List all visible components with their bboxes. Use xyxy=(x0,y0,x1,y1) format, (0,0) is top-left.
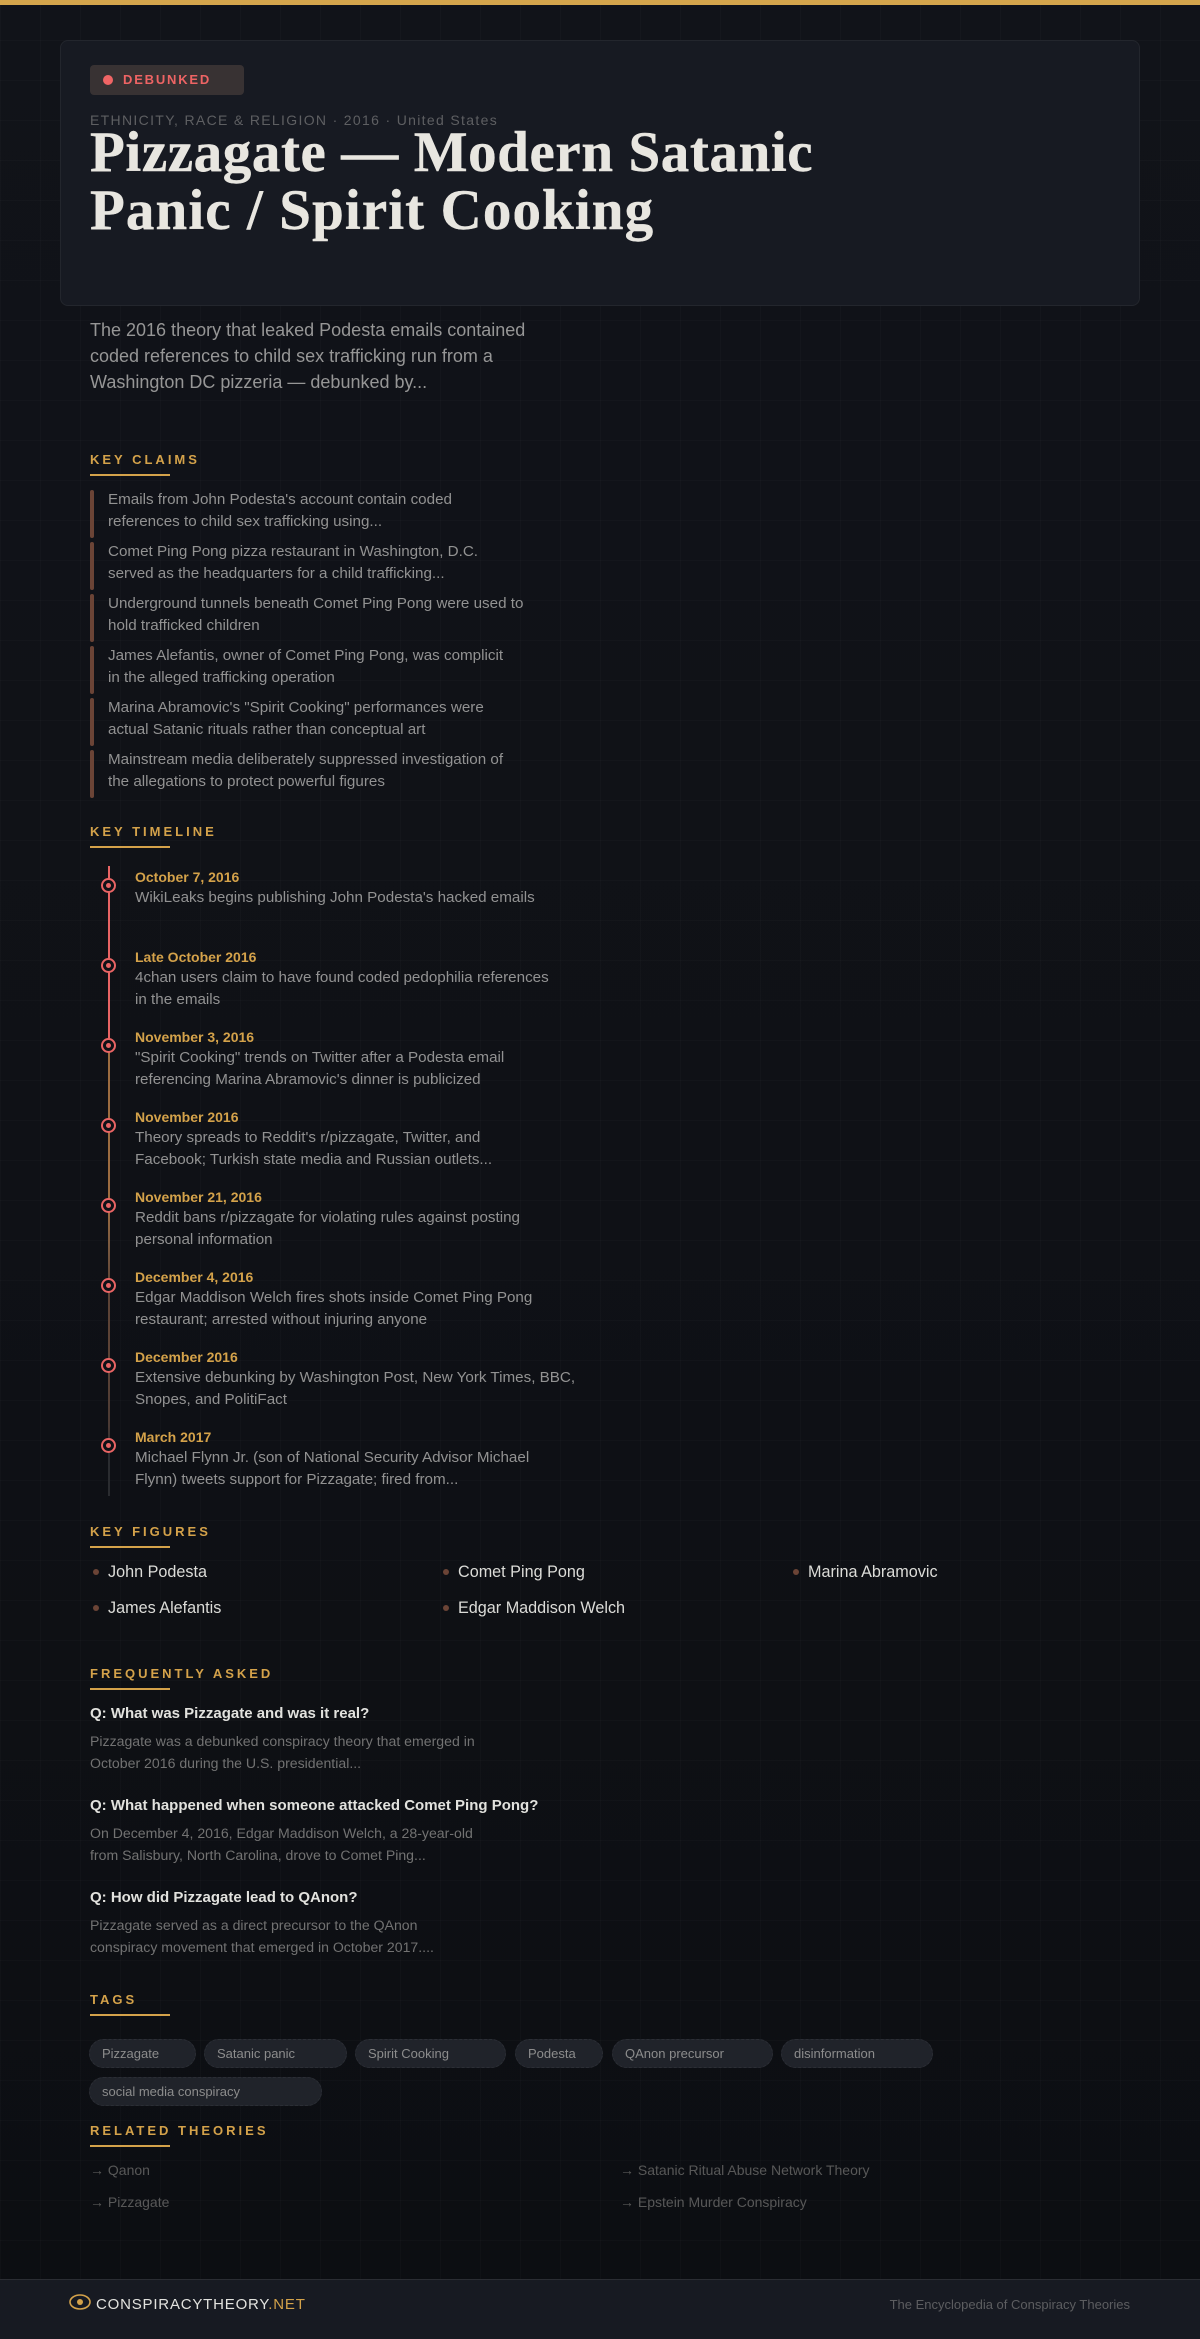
claim 4: in the alleged trafficking operation xyxy=(108,669,335,686)
status badge: debunked xyxy=(90,65,244,95)
faq 2: On December 4, 2016, Edgar Maddison Welch, a 28-year-old xyxy=(90,1825,473,1841)
tag: social media conspiracy xyxy=(89,2077,322,2106)
title: Panic / Spirit Cooking xyxy=(90,179,654,242)
panel: related theories list xyxy=(90,2162,870,2210)
tag: Satanic panic: Satanic panic xyxy=(217,2046,295,2061)
event: November 2016: Theory spreads to Reddit's r/pizzagate, Twitter, and xyxy=(135,1129,480,1146)
logo wordmark: CONSPIRACYTHEORY.NET xyxy=(96,2296,306,2313)
tag: disinformation: disinformation xyxy=(794,2046,875,2061)
tag: QAnon precursor xyxy=(612,2039,773,2068)
icon: status dot xyxy=(103,75,113,85)
panel: claims list xyxy=(90,490,523,798)
tag: Satanic panic xyxy=(204,2039,347,2068)
faq 1: Q: What was Pizzagate and was it real? xyxy=(90,1705,369,1722)
event: December 2016: Extensive debunking by Washington Post, New York Times, BBC, xyxy=(135,1369,575,1386)
event: March 2017: Flynn) tweets support for Pizzagate; fired from... xyxy=(135,1471,458,1488)
faq 2: Q: What happened when someone attacked Comet Ping Pong? xyxy=(90,1797,538,1814)
chart: timeline: March 2017 xyxy=(135,1429,211,1445)
claim 4 xyxy=(90,646,503,694)
panel: tag pills xyxy=(89,2039,933,2106)
tag: QAnon precursor: QAnon precursor xyxy=(625,2046,724,2061)
event: Late October 2016 xyxy=(101,949,549,1008)
event: December 4, 2016: Edgar Maddison Welch fires shots inside Comet Ping Pong xyxy=(135,1289,532,1306)
panel: key figures list xyxy=(93,1563,938,1617)
event: March 2017: Michael Flynn Jr. (son of National Security Advisor Michael xyxy=(135,1449,529,1466)
claim 5: actual Satanic rituals rather than conceptual art xyxy=(108,721,425,738)
tag: Podesta xyxy=(515,2039,603,2068)
tag: Pizzagate: Pizzagate xyxy=(102,2046,159,2061)
claim 1 xyxy=(90,490,452,538)
heading: key claims: KEY CLAIMS xyxy=(90,452,200,467)
tag: Pizzagate xyxy=(89,2039,196,2068)
claim 5 xyxy=(90,698,484,746)
figure: John Podesta: John Podesta xyxy=(108,1563,207,1581)
event: March 2017 xyxy=(101,1429,529,1488)
event: November 3, 2016: referencing Marina Abramovic's dinner is publicized xyxy=(135,1071,481,1088)
category meta line: ETHNICITY, RACE & RELIGION · 2016 · United States xyxy=(90,112,498,128)
event: November 2016: Facebook; Turkish state media and Russian outlets... xyxy=(135,1151,492,1168)
faq 2: from Salisbury, North Carolina, drove to Comet Ping... xyxy=(90,1847,426,1863)
event: October 7, 2016: WikiLeaks begins publishing John Podesta's hacked emails xyxy=(135,889,535,906)
summary text xyxy=(90,320,525,392)
heading: frequently asked: FREQUENTLY ASKED xyxy=(90,1666,273,1681)
chart: timeline: November 3, 2016 xyxy=(135,1029,254,1045)
chart: timeline: November 2016 xyxy=(135,1109,239,1125)
timeline spine xyxy=(108,866,110,1496)
chart: timeline: Late October 2016 xyxy=(135,949,256,965)
claim 2: Comet Ping Pong pizza restaurant in Washington, D.C. xyxy=(108,543,478,560)
tag: social media conspiracy: social media conspiracy xyxy=(102,2084,240,2099)
tag: Podesta: Podesta xyxy=(528,2046,576,2061)
claim 3: Underground tunnels beneath Comet Ping Pong were used to xyxy=(108,595,523,612)
claim 2: served as the headquarters for a child trafficking... xyxy=(108,565,445,582)
event: December 2016 xyxy=(101,1349,575,1408)
faq 2 xyxy=(90,1797,538,1863)
claim 3: hold trafficked children xyxy=(108,617,260,634)
faq 3: conspiracy movement that emerged in October 2017.... xyxy=(90,1939,434,1955)
faq 3: Pizzagate served as a direct precursor to the QAnon xyxy=(90,1917,417,1933)
claim 1: references to child sex trafficking using... xyxy=(108,513,382,530)
claim 1: Emails from John Podesta's account contain coded xyxy=(108,491,452,508)
heading: related theories: RELATED THEORIES xyxy=(90,2123,268,2138)
summary text: Washington DC pizzeria — debunked by... xyxy=(90,372,427,392)
event: Late October 2016: in the emails xyxy=(135,991,220,1008)
event: December 4, 2016: restaurant; arrested without injuring anyone xyxy=(135,1311,427,1328)
icon: eye logo xyxy=(69,2294,91,2310)
faq 1: October 2016 during the U.S. presidential... xyxy=(90,1755,361,1771)
event: November 2016 xyxy=(101,1109,492,1168)
summary text: coded references to child sex trafficking run from a xyxy=(90,346,493,366)
faq 3: Q: How did Pizzagate lead to QAnon? xyxy=(90,1889,358,1906)
event: November 21, 2016: Reddit bans r/pizzagate for violating rules against posting xyxy=(135,1209,520,1226)
figure: James Alefantis: James Alefantis xyxy=(108,1599,221,1617)
footer xyxy=(0,2279,1200,2339)
chart: timeline: October 7, 2016 xyxy=(135,869,239,885)
faq 1: Pizzagate was a debunked conspiracy theory that emerged in xyxy=(90,1733,475,1749)
chart: timeline: December 4, 2016 xyxy=(135,1269,253,1285)
claim 6: Mainstream media deliberately suppressed investigation of xyxy=(108,751,503,768)
link: Satanic Ritual Abuse Network Theory: → Satanic Ritual Abuse Network Theory xyxy=(620,2162,870,2178)
faq 3 xyxy=(90,1889,434,1955)
event: November 3, 2016: "Spirit Cooking" trends on Twitter after a Podesta email xyxy=(135,1049,504,1066)
link: Qanon: → Qanon xyxy=(90,2162,150,2178)
figure: Comet Ping Pong: Comet Ping Pong xyxy=(458,1563,585,1581)
tag: disinformation xyxy=(781,2039,933,2068)
footer tagline: The Encyclopedia of Conspiracy Theories xyxy=(890,2297,1130,2312)
event: October 7, 2016 xyxy=(101,869,535,906)
link: Epstein Murder Conspiracy: → Epstein Murder Conspiracy xyxy=(620,2194,807,2210)
tag: Spirit Cooking: Spirit Cooking xyxy=(368,2046,449,2061)
claim 6 xyxy=(90,750,504,798)
heading: key figures: KEY FIGURES xyxy=(90,1524,211,1539)
panel: hero header xyxy=(60,40,1140,306)
claim 5: Marina Abramovic's "Spirit Cooking" performances were xyxy=(108,699,484,716)
event: November 3, 2016 xyxy=(101,1029,504,1088)
claim 6: the allegations to protect powerful figures xyxy=(108,773,385,790)
link: Pizzagate: → Pizzagate xyxy=(90,2194,169,2210)
summary text: The 2016 theory that leaked Podesta emails contained xyxy=(90,320,525,340)
chart: timeline xyxy=(101,866,575,1496)
event: November 21, 2016 xyxy=(101,1189,520,1248)
top accent bar xyxy=(0,0,1200,5)
chart: timeline: December 2016 xyxy=(135,1349,238,1365)
title xyxy=(90,121,813,242)
tag: Spirit Cooking xyxy=(355,2039,506,2068)
event: December 4, 2016 xyxy=(101,1269,532,1328)
event: Late October 2016: 4chan users claim to have found coded pedophilia references xyxy=(135,969,549,986)
title: Pizzagate — Modern Satanic xyxy=(90,121,813,184)
chart: timeline: November 21, 2016 xyxy=(135,1189,262,1205)
claim 3 xyxy=(90,594,523,642)
badge label: DEBUNKED xyxy=(123,72,211,87)
event: November 21, 2016: personal information xyxy=(135,1231,273,1248)
faq 1 xyxy=(90,1705,475,1771)
claim 4: James Alefantis, owner of Comet Ping Pong, was complicit xyxy=(108,647,503,664)
heading: tags: TAGS xyxy=(90,1992,137,2007)
heading: key timeline: KEY TIMELINE xyxy=(90,824,217,839)
figure: Marina Abramovic: Marina Abramovic xyxy=(808,1563,938,1581)
event: December 2016: Snopes, and PolitiFact xyxy=(135,1391,287,1408)
figure: Edgar Maddison Welch: Edgar Maddison Welch xyxy=(458,1599,625,1617)
claim 2 xyxy=(90,542,478,590)
